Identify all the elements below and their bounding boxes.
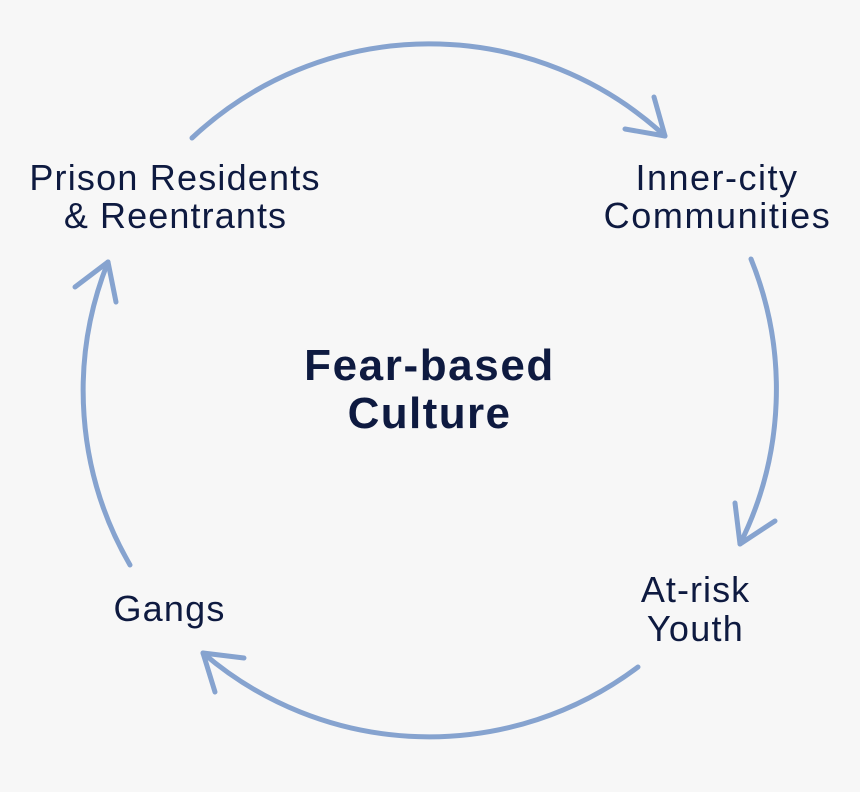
label: at-risk youth (641, 569, 750, 649)
label: gangs: Gangs (113, 588, 226, 629)
arrow: inner-city communities to at-risk youth (735, 259, 776, 544)
label: at-risk youth: Youth (647, 608, 744, 649)
center title: Fear-based (304, 341, 555, 390)
label: inner-city communities (604, 157, 831, 236)
arrow: gangs to prison residents (75, 262, 130, 565)
center title: Culture (348, 389, 511, 438)
label: prison residents and reentrants (29, 157, 321, 236)
center title (304, 341, 555, 438)
label: prison residents and reentrants: & Reentrants (64, 195, 287, 236)
label: inner-city communities: Inner-city (635, 157, 799, 198)
arrow: prison residents to inner-city communities (192, 44, 665, 138)
arrow: at-risk youth to gangs (203, 653, 638, 737)
label: at-risk youth: At-risk (641, 569, 750, 610)
label: prison residents and reentrants: Prison Residents (29, 157, 321, 198)
label: inner-city communities: Communities (604, 195, 831, 236)
